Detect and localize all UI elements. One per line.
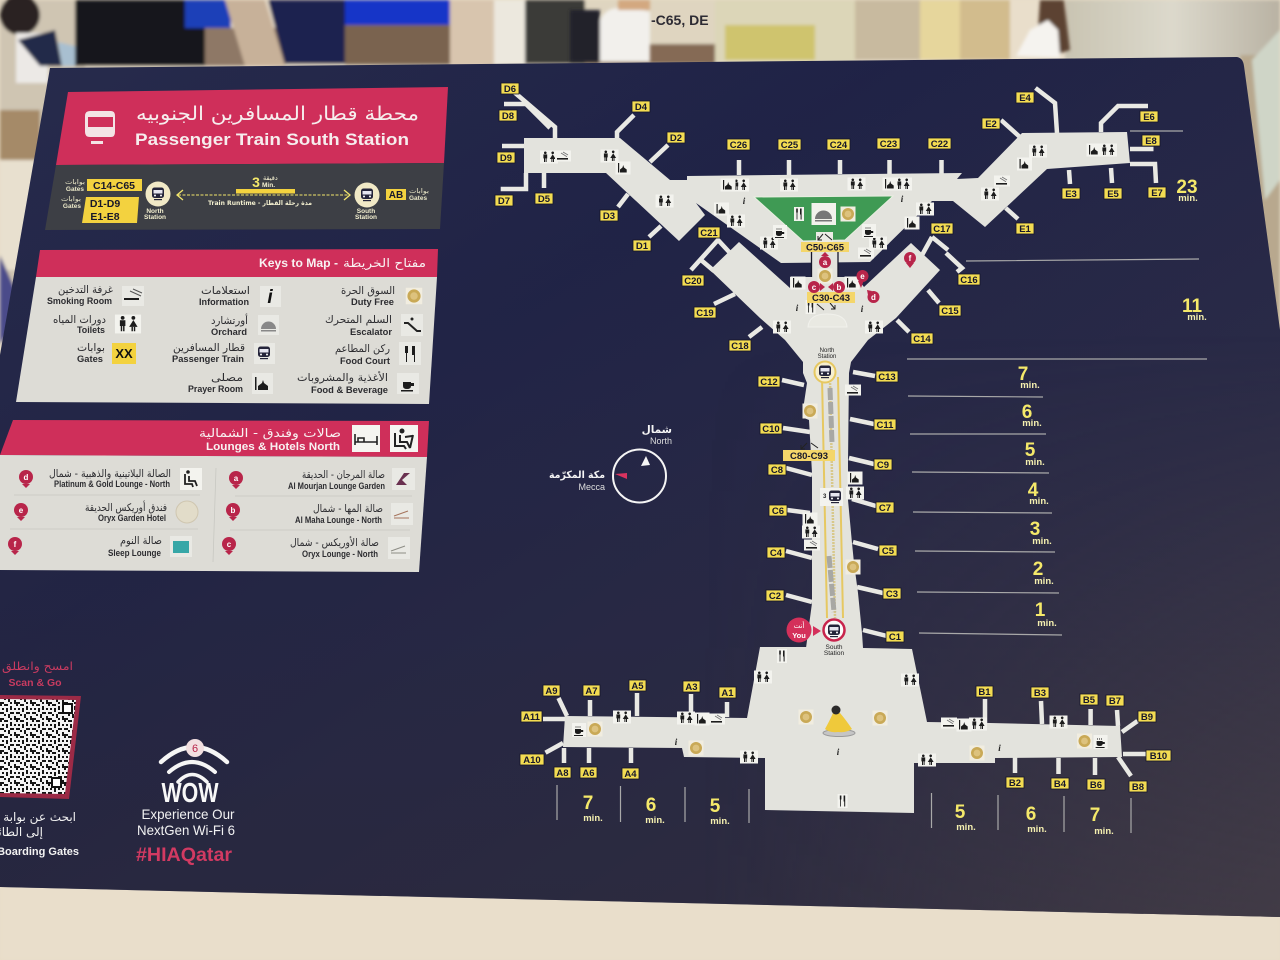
walking times: C and north values: min.	[1029, 496, 1049, 507]
text: north station	[144, 208, 166, 221]
walking times: C and north values: 23	[1176, 177, 1198, 198]
divider lines	[10, 468, 412, 562]
gate box: AB: AB	[389, 190, 403, 201]
pins: lounge locators a to f: e	[860, 272, 865, 281]
station: south you are here	[824, 620, 844, 657]
key: passenger train	[172, 342, 275, 365]
corridor edges	[812, 252, 838, 277]
lounge: e Oryx Garden Hotel: Oryx Garden Hotel	[98, 513, 166, 524]
icons: information	[675, 194, 1001, 757]
walking times: C and north values: min.	[1020, 380, 1040, 391]
lounge: b Al Maha: صالة المها - شمال	[313, 503, 383, 515]
gate labels: E pier: E3	[1065, 189, 1077, 200]
key: duty free: Duty Free	[351, 297, 394, 308]
station: south you are here: South	[826, 644, 843, 651]
gate labels: D pier: D5	[538, 194, 551, 205]
label: C50-C65: C50-C65	[806, 242, 845, 254]
gate labels: A concourse: A11	[523, 712, 541, 723]
gate labels: D pier: D8	[502, 111, 514, 122]
text: gates labels left: Gates	[63, 203, 81, 210]
icon: north station	[146, 182, 170, 206]
text: train runtime: Train Runtime - مدة رحلة القطار	[208, 199, 312, 207]
walking times: A and B values: min.	[583, 813, 603, 824]
map: north terminal floorplan	[524, 132, 1130, 648]
gate labels: B concourse: B6	[1090, 780, 1102, 791]
pins: lounge locators a to f: a	[823, 258, 828, 267]
key: information	[199, 285, 281, 308]
walking times: C and north values	[1018, 177, 1207, 629]
walking times: C and north values: min.	[1032, 536, 1052, 547]
icons: information: i	[998, 743, 1001, 753]
gate labels: C top row	[727, 138, 951, 151]
lounge: d Platinum and Gold: الصالة البلاتينية والذهبية - شمال	[49, 468, 171, 480]
heading: scan and go: امسح وانطلق	[2, 659, 73, 674]
text: experience: Experience Our	[142, 806, 235, 822]
text: gates labels left: بوابات	[65, 178, 85, 186]
gate labels: C top row: C23	[880, 139, 897, 150]
gate labels: D pier: D9	[500, 153, 512, 164]
gate labels: D pier: D7	[498, 196, 510, 207]
key: information: استعلامات	[201, 285, 250, 297]
gate labels: E pier: E6	[1143, 112, 1155, 123]
key: prayer room: Prayer Room	[188, 384, 243, 395]
lounge: f Sleep Lounge: f	[14, 540, 17, 549]
gate labels: B concourse: B8	[1132, 782, 1144, 793]
icon: bed	[352, 425, 380, 452]
heading: keys to map: Keys to Map -	[259, 258, 338, 270]
gate labels: C14 to C21: C19	[696, 308, 714, 319]
gate labels: C14 to C21	[682, 223, 980, 352]
gate labels: B concourse	[976, 686, 1171, 793]
lounge: d Platinum and Gold	[19, 468, 202, 490]
lounge: e Oryx Garden Hotel: فندق أوريكس الحديقة	[85, 500, 167, 514]
text: WOW: WOW	[162, 777, 219, 808]
gate labels: D pier: D4	[635, 102, 648, 113]
text: gates labels left	[61, 178, 85, 210]
gate labels: D pier: D1	[636, 241, 649, 252]
gate labels: C stem	[758, 371, 904, 643]
walking times: C and north values: 5	[1025, 440, 1036, 461]
text: north	[642, 424, 672, 446]
walking times: A and B values: 7	[583, 793, 593, 814]
text: south station: Station	[355, 214, 377, 221]
icon: south station	[354, 182, 380, 208]
gate labels: A concourse: A3	[685, 682, 698, 693]
arrow: runtime line	[177, 190, 350, 200]
text: north station: Station	[144, 214, 166, 221]
gate box: AB	[386, 189, 406, 201]
label: C30-C43: C30-C43	[812, 293, 850, 304]
icons: information: i	[837, 747, 840, 757]
icon: train bar	[236, 189, 295, 194]
station: south you are here: Station	[824, 650, 844, 657]
text: gates labels right: بوابات	[409, 187, 429, 195]
key: orchard: Orchard	[211, 327, 247, 338]
key: smoking room: غرفة التدخين	[58, 284, 113, 296]
walking times: C and north values: 6	[1022, 402, 1032, 423]
text: experience: NextGen Wi-Fi 6	[137, 822, 235, 838]
lounge: a Al Mourjan	[229, 468, 415, 492]
icons: food and beverage	[572, 224, 1108, 749]
qr code	[0, 695, 81, 799]
walking times: A and B values: min.	[956, 822, 976, 833]
icons: food court	[777, 207, 848, 808]
gate box: D1-D9 E1-E8: D1-D9	[90, 198, 120, 210]
lounge: b Al Maha	[226, 503, 413, 526]
heading: scan and go	[2, 659, 73, 689]
gate box: D1-D9 E1-E8	[82, 197, 139, 223]
gate labels: A concourse: A6	[582, 768, 595, 779]
text: gates labels left: Gates	[66, 186, 84, 193]
lounge: c Oryx	[222, 536, 410, 560]
walking times: A and B values: min.	[1027, 824, 1047, 835]
gate labels: D pier	[495, 83, 685, 252]
gate labels: D pier: D3	[603, 211, 615, 222]
gate labels: C14 to C21: C18	[731, 341, 749, 352]
icon: train	[85, 111, 115, 144]
station: midway bus icon	[820, 488, 843, 506]
icons: prayer rooms	[616, 144, 1102, 732]
walking times: C and north values: min.	[1034, 576, 1054, 587]
lounge: a Al Mourjan: Al Mourjan Lounge Garden	[288, 481, 385, 492]
gate labels: B concourse: B9	[1141, 712, 1153, 723]
lounge: e Oryx Garden Hotel	[14, 500, 198, 524]
lounge: a Al Mourjan: صالة المرجان - الحديقة	[302, 469, 385, 481]
lounge: b Al Maha: b	[231, 506, 236, 515]
walking times: C and north values: min.	[1178, 193, 1198, 204]
map: gate stubs	[501, 88, 1156, 776]
gate labels: C14 to C21: C20	[684, 276, 702, 287]
key: prayer room: مصلى	[211, 372, 243, 384]
key: orchard: أورتشارد	[211, 313, 248, 327]
gate labels: C stem: C3	[886, 589, 898, 600]
gate labels: C14 to C21: C21	[700, 228, 718, 239]
station: north: North	[820, 348, 834, 354]
gate labels: D pier: D6	[504, 84, 516, 95]
arrival dome	[808, 314, 847, 327]
callout: you are here	[786, 618, 821, 642]
gate labels: C stem: C6	[772, 506, 784, 517]
callout: you are here: أنت	[794, 621, 804, 630]
text: 3 minutes: 3	[252, 174, 260, 190]
key: orchard	[211, 313, 279, 338]
key: gates: بوابات	[77, 342, 105, 354]
text: hashtag: #HIAQatar	[136, 845, 233, 866]
map: rail tracks	[822, 377, 843, 618]
icons: information: i	[901, 194, 904, 204]
icons: information: i	[743, 196, 746, 206]
icons: toilets	[540, 144, 1117, 766]
gate labels: C stem: C5	[882, 546, 895, 557]
gate labels: C stem: C2	[769, 591, 781, 602]
lounge: f Sleep Lounge: Sleep Lounge	[108, 548, 161, 559]
lounge: c Oryx: صالة الأوريكس - شمال	[290, 536, 379, 549]
walking times: A and B values	[583, 793, 1114, 837]
walking times: C and north values: min.	[1022, 418, 1042, 429]
icons: smoking rooms	[555, 150, 1010, 728]
label: C80-C93: C80-C93	[790, 451, 828, 462]
pins: lounge locators a to f: f	[909, 254, 912, 263]
key: food court: ركن المطاعم	[335, 343, 390, 355]
gate labels: E pier: E4	[1019, 93, 1032, 104]
walking times: C and north values: min.	[1037, 618, 1057, 629]
gate labels: A concourse: A7	[585, 686, 598, 697]
gate labels: C14 to C21: C15	[941, 306, 959, 317]
area: orchard green	[754, 196, 893, 241]
gate labels: C14 to C21: C17	[933, 224, 951, 235]
walking times: C and north values: 1	[1035, 600, 1046, 621]
gate labels: A concourse: A1	[721, 688, 734, 699]
key: smoking room: Smoking Room	[47, 296, 112, 307]
station: midway bus icon: 3	[823, 494, 827, 500]
lounge: c Oryx: c	[227, 540, 232, 549]
lounge: c Oryx: Oryx Lounge - North	[302, 549, 378, 560]
heading: scan and go: Scan & Go	[8, 677, 62, 689]
gate labels: D pier: D2	[670, 133, 682, 144]
lounge: f Sleep Lounge: صالة النوم	[120, 535, 162, 547]
walking times: A and B values: min.	[710, 816, 730, 827]
text: south station: South	[357, 208, 375, 215]
gate labels: A concourse: A5	[631, 681, 644, 692]
icons: escalator arrows	[801, 232, 835, 449]
gate labels: C top row: C22	[931, 139, 948, 150]
panel: lounges and hotels north	[0, 420, 429, 572]
gate labels: C top row: C25	[781, 140, 799, 151]
walking times: A and B values: min.	[645, 815, 665, 826]
key: food court	[335, 342, 421, 367]
walking times: A and B values: 5	[955, 802, 966, 823]
gate labels: B concourse: B3	[1034, 688, 1046, 699]
gate labels: C stem: C8	[771, 465, 783, 476]
key: escalator	[325, 314, 423, 338]
gate labels: B concourse: B7	[1109, 696, 1121, 707]
panel: WOW wifi	[136, 739, 235, 866]
icons: duty free	[588, 206, 1092, 760]
text: mecca: Mecca	[578, 482, 605, 492]
text: gates labels left: بوابات	[61, 195, 81, 203]
callout: you are here: You	[792, 631, 806, 640]
key: escalator: السلم المتحرك	[325, 314, 392, 326]
gate labels: A concourse: A4	[624, 769, 637, 780]
heading: keys to map: مفتاح الخريطة	[343, 256, 426, 271]
gate labels: C stem: C10	[762, 424, 780, 435]
text: north: North	[650, 436, 672, 446]
gate labels: C stem: C1	[889, 632, 902, 643]
walking times: A and B values: 7	[1090, 805, 1100, 826]
key: prayer room	[188, 372, 273, 395]
text: 3 minutes	[252, 174, 278, 190]
gate labels: C14 to C21: C16	[960, 275, 978, 286]
gate labels: B concourse: B1	[978, 687, 991, 698]
gate labels: C top row: C24	[830, 140, 848, 151]
key: gates: XX	[115, 346, 133, 361]
key: food and beverage: الأغذية والمشروبات	[297, 371, 388, 384]
key: information: i	[267, 287, 273, 308]
walking times: C and north values: 2	[1033, 559, 1043, 580]
gate labels: A concourse: A10	[523, 755, 541, 766]
key: toilets	[53, 314, 141, 336]
gate labels: E pier: E7	[1151, 188, 1163, 199]
panel: passenger train south station header	[56, 87, 448, 165]
gate labels: B concourse: B4	[1054, 779, 1067, 790]
walking times: A and B values: min.	[1094, 826, 1114, 837]
heading: English station title: Passenger Train South Station	[135, 130, 409, 149]
key: toilets: دورات المياه	[53, 314, 106, 326]
key: escalator: Escalator	[350, 327, 392, 338]
heading: keys to map	[259, 256, 426, 271]
key: passenger train: قطار المسافرين	[173, 342, 245, 354]
key: toilets: Toilets	[77, 325, 105, 336]
panel: scan and go QR	[0, 659, 81, 858]
walking times: C and north values: 4	[1028, 480, 1039, 501]
walking times: C and north values: 11	[1182, 296, 1202, 317]
icon: statue	[823, 706, 855, 736]
walking times: C and north values: 7	[1018, 364, 1028, 385]
lounge: d Platinum and Gold: d	[24, 473, 29, 482]
icon: lounge seat	[390, 425, 418, 452]
gate labels: E pier: E2	[985, 119, 997, 130]
key: food and beverage: Food & Beverage	[311, 385, 388, 396]
key: smoking room	[47, 284, 144, 307]
station: north: Station	[818, 354, 836, 360]
gate labels: C top row: C26	[730, 140, 747, 151]
walking times: C and north values: 3	[1030, 519, 1040, 540]
panel: train runtime strip	[45, 163, 444, 230]
text: gates labels right: Gates	[409, 195, 427, 202]
text: experience	[137, 806, 235, 838]
gate labels: B concourse: B10	[1150, 751, 1167, 762]
icons: information: i	[796, 303, 799, 313]
lounge: a Al Mourjan: a	[234, 474, 239, 483]
gate labels: C stem: C9	[877, 460, 889, 471]
text: boarding gates	[0, 810, 79, 858]
gate labels: A concourse: A8	[556, 768, 569, 779]
text: gates labels right	[409, 187, 429, 202]
lounge: b Al Maha: Al Maha Lounge - North	[295, 515, 382, 526]
compass: north and Mecca	[549, 424, 672, 502]
map: south terminal floorplan	[563, 647, 1122, 813]
gate labels: A concourse: A9	[545, 686, 558, 697]
icon: 6 badge: 6	[192, 743, 198, 755]
pins: lounge locators a to f: c	[812, 283, 817, 292]
heading: lounges and hotels Arabic: صالات وفندق - الشمالية	[199, 426, 341, 441]
gate box: D1-D9 E1-E8: E1-E8	[90, 211, 120, 223]
text: mecca	[549, 470, 605, 492]
key: passenger train: Passenger Train	[172, 354, 244, 365]
panel: keys to map	[16, 249, 438, 404]
text: 3 minutes: Min.	[262, 182, 275, 189]
gate labels: C14 to C21: C14	[913, 334, 931, 345]
key: gates: Gates	[77, 354, 103, 365]
lounge: f Sleep Lounge	[8, 535, 192, 559]
gate labels: C stem: C7	[879, 503, 891, 514]
lounge: d Platinum and Gold: Platinum & Gold Lounge - North	[54, 479, 170, 490]
icons: information: i	[675, 737, 678, 747]
walking times: A and B values: 6	[1026, 804, 1036, 825]
walking times: A and B tick lines	[557, 785, 1131, 833]
walking times: C and north values: min.	[1025, 457, 1045, 468]
gate labels: E pier: E1	[1019, 224, 1032, 235]
sign text: -C65, DE	[651, 12, 709, 28]
heading: Arabic station title: محطة قطار المسافرين الجنوبيه	[136, 103, 419, 125]
station: north	[814, 348, 836, 382]
lounge: e Oryx Garden Hotel: e	[19, 506, 24, 515]
text: north station: North	[146, 208, 164, 215]
walking times: A and B values: 5	[710, 796, 721, 817]
walking times: C and north values: min.	[1187, 312, 1207, 323]
gate labels: E pier: E8	[1145, 136, 1157, 147]
key: gates	[77, 342, 136, 365]
pins: lounge locators a to f: b	[837, 283, 842, 292]
gate labels: C stem: C13	[878, 372, 896, 383]
gate labels: C stem: C4	[770, 548, 783, 559]
text: north: شمال	[642, 424, 672, 436]
icons: information: i	[861, 304, 864, 314]
gate labels: E pier	[982, 92, 1166, 235]
key: information: Information	[199, 297, 249, 308]
pins: lounge locators a to f: d	[871, 293, 876, 302]
key: food court: Food Court	[340, 356, 391, 367]
gate box: C14-C65: C14-C65	[93, 180, 135, 192]
icon: orchard logo	[812, 203, 836, 225]
heading: lounges and hotels English: Lounges & Hotels North	[206, 441, 340, 453]
text: 3 minutes: دقيقة	[263, 174, 278, 182]
label: C80-C93	[783, 450, 835, 462]
gate labels: C stem: C11	[877, 420, 894, 431]
icon: wifi arcs	[161, 747, 227, 782]
text: south station	[355, 208, 377, 221]
walking times: A and B values: 6	[646, 795, 656, 816]
gate labels: A concourse	[520, 680, 736, 780]
gate labels: E pier: E5	[1107, 189, 1120, 200]
key: duty free	[341, 285, 422, 308]
walking times: C and north distance lines	[907, 131, 1207, 635]
key: food and beverage	[297, 371, 419, 396]
pins: lounge locators a to f	[808, 252, 916, 303]
text: boarding gates: ابحث عن بوابة	[3, 810, 76, 825]
key: duty free: السوق الحرة	[341, 285, 395, 297]
gate labels: B concourse: B2	[1009, 778, 1021, 789]
gate labels: B concourse: B5	[1083, 695, 1096, 706]
text: mecca: مكة المكرّمة	[549, 470, 605, 481]
gate labels: C stem: C12	[760, 377, 778, 388]
